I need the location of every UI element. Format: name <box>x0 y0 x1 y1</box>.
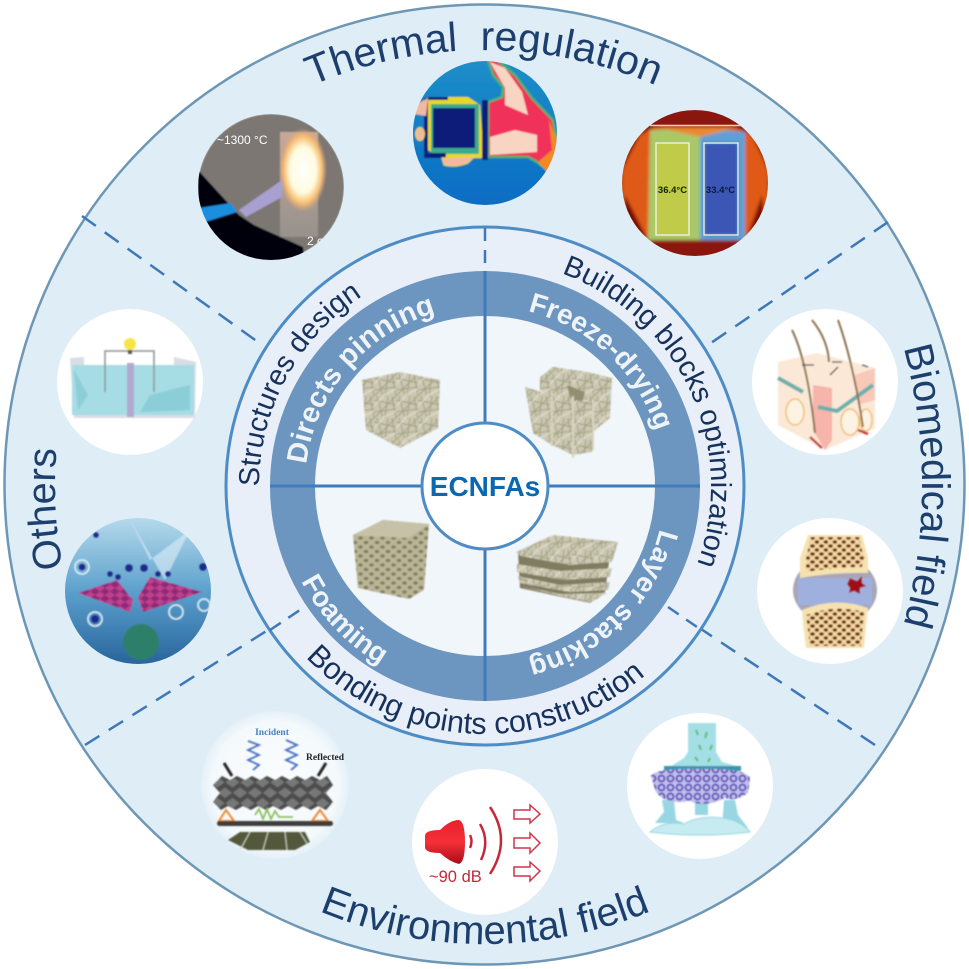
ring label: Structures design: Structures design <box>238 286 361 485</box>
centre hub <box>422 423 548 549</box>
heading: Biomedical field: Biomedical field <box>904 344 952 629</box>
heading: Others: Others <box>27 450 61 568</box>
icon: layered stack <box>516 535 618 603</box>
hub title: ECNFAs <box>430 471 540 502</box>
sound waves <box>470 807 501 874</box>
band label: Freeze-drying: Freeze-drying <box>530 293 670 430</box>
cross dividers <box>270 271 700 701</box>
incident label: Incident <box>255 728 290 738</box>
image: thermal hand <box>410 60 560 206</box>
image: thermal torso <box>620 108 770 260</box>
image: flame test <box>198 114 344 270</box>
heading: Environmental field: Environmental field <box>322 885 648 944</box>
image: water filtration <box>627 713 773 859</box>
dashed ring continuations <box>270 607 697 630</box>
icon: foam cube <box>353 520 429 599</box>
icon: honeycomb aerogel <box>525 367 612 458</box>
band <box>292 294 678 678</box>
image: ions on sheet <box>65 518 211 664</box>
radial dashed dividers <box>82 216 888 745</box>
flame temperature label: ~1300 °C <box>217 133 268 147</box>
icon: fibrous cube <box>362 372 440 448</box>
arrows <box>514 805 540 881</box>
band label: Foaming: Foaming <box>302 573 387 666</box>
image: sound speaker <box>412 769 558 915</box>
temperature label 36.4: 36.4°C <box>658 185 687 196</box>
reflected label: Reflected <box>306 753 345 763</box>
speaker cone <box>425 820 465 864</box>
panel: central ring <box>226 227 744 745</box>
sound level label: ~90 dB <box>429 868 482 886</box>
band label: Directs pinning: Directs pinning <box>286 298 434 462</box>
image: electromagnetic shielding <box>201 711 349 859</box>
ring label: Building blocks optimization: Building blocks optimization <box>564 256 732 566</box>
ring label: Bonding points construction: Bonding points construction <box>307 644 644 734</box>
image: joint <box>757 518 903 664</box>
image: electrochemical tank <box>57 309 203 455</box>
band label: Layer stacking: Layer stacking <box>530 530 678 675</box>
temperature label 33.4: 33.4°C <box>706 185 735 196</box>
heading: Thermal regulation: Thermal regulation <box>302 21 660 84</box>
flame scale label: 2 c <box>307 234 323 248</box>
image: skin <box>752 309 898 455</box>
